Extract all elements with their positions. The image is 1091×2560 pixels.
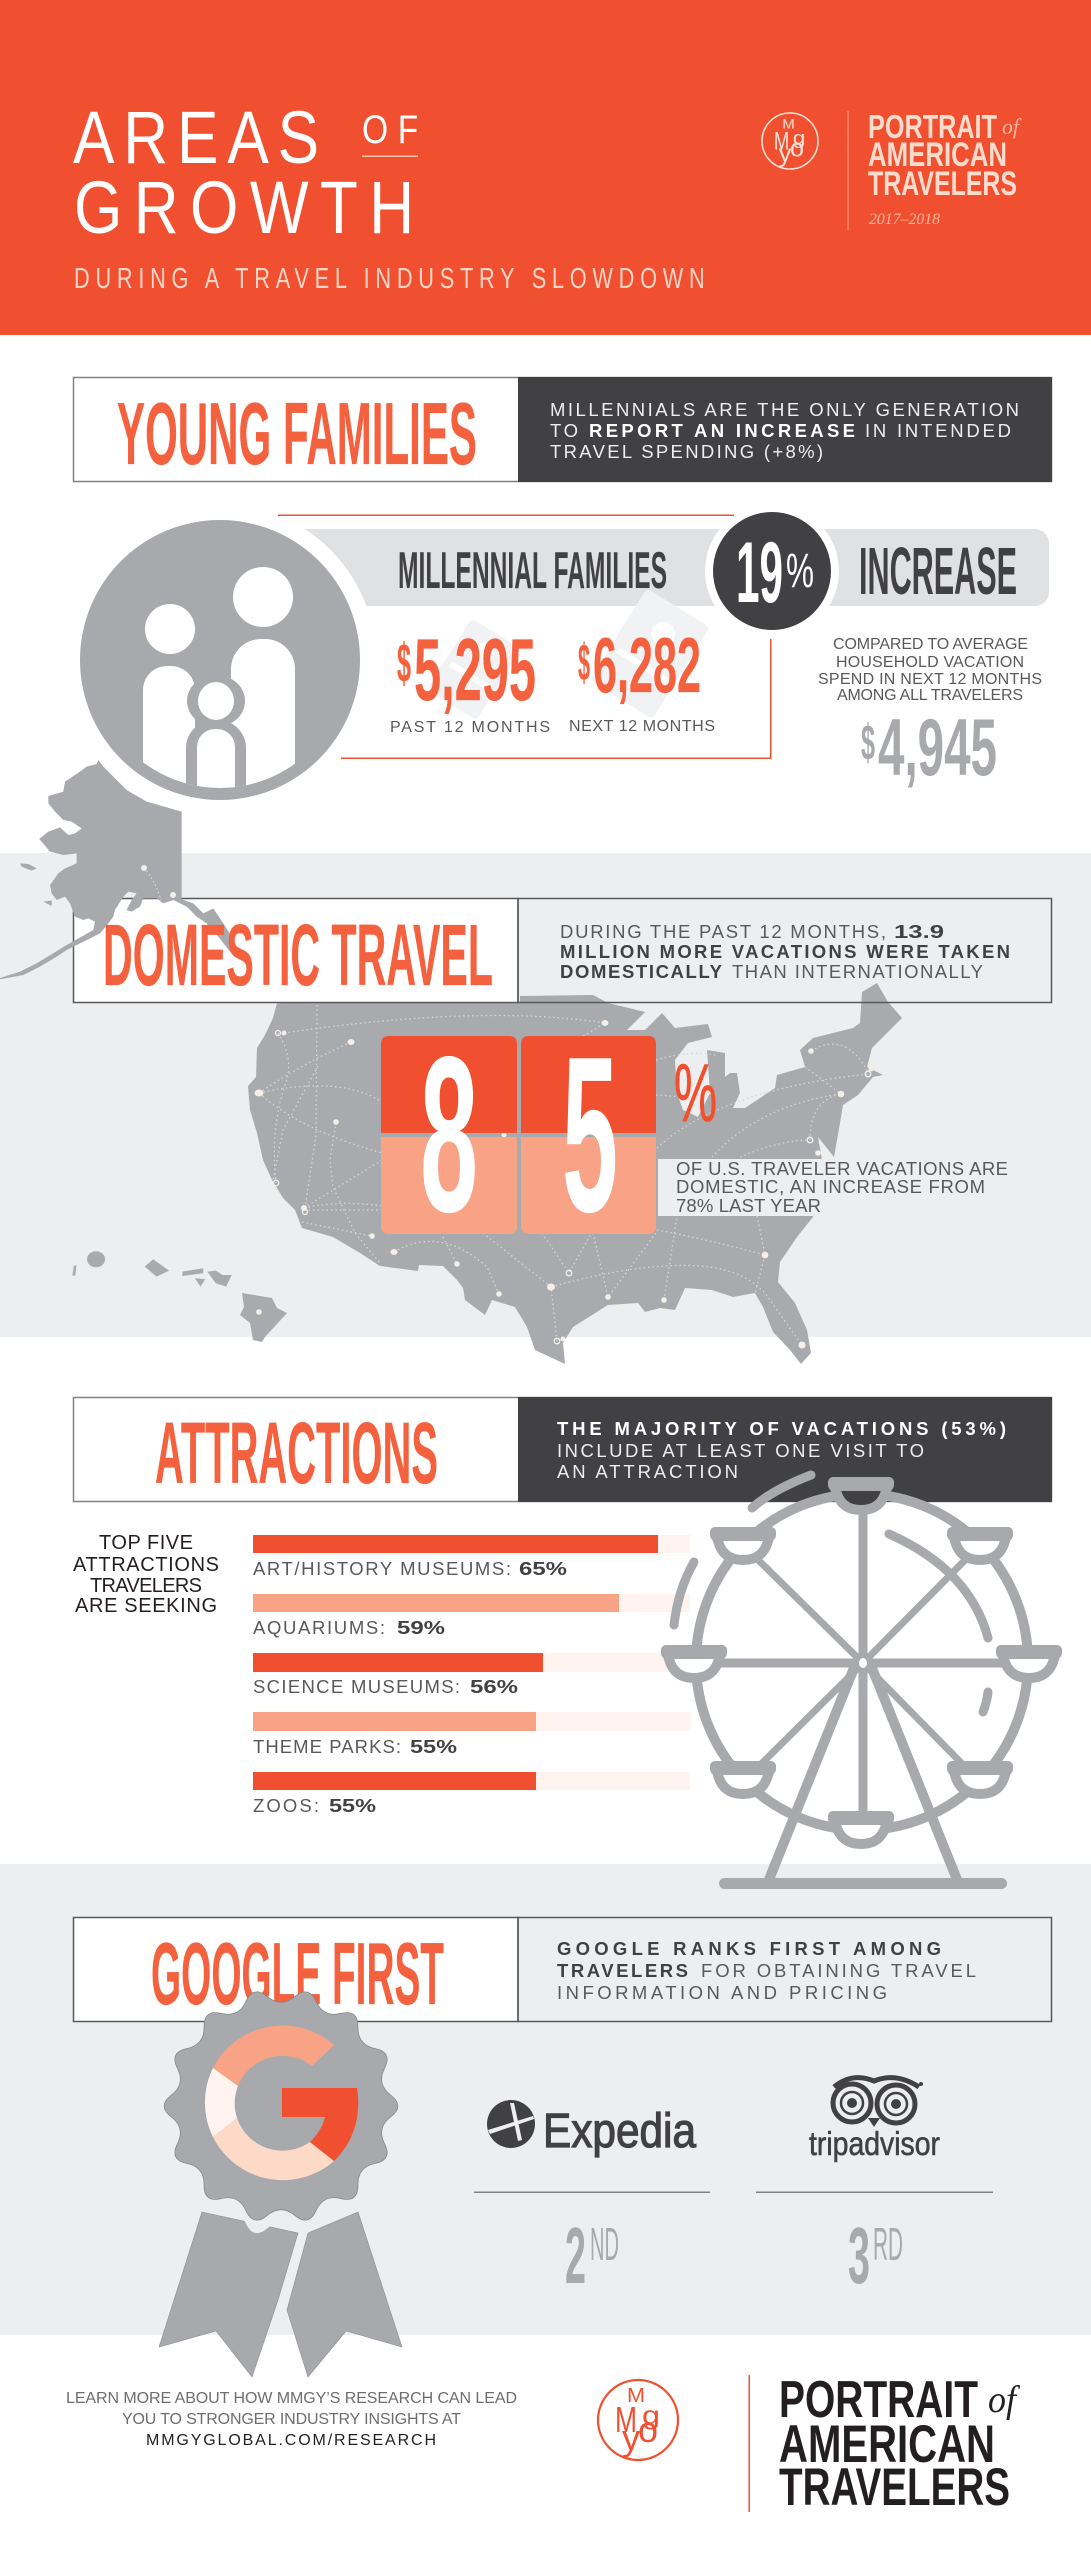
logo: tripadvisor [756,2078,993,2193]
footer text: learn more: MMGYGLOBAL.COM/RESEARCH [146,2432,436,2449]
title: Areas of Growth: AREAS [73,97,319,179]
title: Areas of Growth [73,97,418,249]
text: MILLENNIAL FAMILIES [398,542,667,600]
text: millennials intro: MILLENNIALS ARE THE ONLY GENERATION [550,399,1019,420]
header panel [0,0,1091,335]
text: vacation share: 78% LAST YEAR [676,1195,821,1216]
logo: expedia: Expedia [543,2105,696,2158]
text: average household comparison [818,636,1042,704]
logo text: Portrait of American Travelers footer: PORTRAIT [779,2371,978,2429]
bar: aquariums [253,1594,690,1638]
stat: past 12 months spend [390,620,550,736]
footer text: learn more [66,2390,517,2449]
decorative money note icons [427,588,710,720]
logo: MMGY header: g [793,128,805,148]
panel: young families heading box: YOUNG FAMILIES [117,384,477,483]
rank: 3rd: 3 [848,2211,870,2300]
logo: MMGY footer: M [627,2385,645,2407]
logo: MMGY header: y [779,140,792,168]
logo: MMGY footer: g [642,2400,660,2430]
bar: zoos: 55% [329,1795,376,1816]
bar chart: attractions [253,1535,690,1816]
logo: expedia [474,2100,710,2193]
text: google intro: TRAVELERS [557,1960,688,1981]
text: DOMESTIC TRAVEL [103,907,493,1004]
icon: google award rosette [159,1992,402,2377]
text: google intro: INFORMATION AND PRICING [557,1982,887,2003]
map: contiguous USA [248,983,902,1364]
panel: google first heading box: GOOGLE FIRST [151,1924,444,2023]
callout frame lines [278,514,772,759]
text: google intro: GOOGLE RANKS FIRST AMONG [557,1938,941,1959]
logo text: Portrait of American Travelers: of [1002,114,1022,139]
logo text: Portrait of American Travelers: PORTRAIT [868,108,997,145]
bar: science museums: SCIENCE MUSEUMS: [253,1676,460,1697]
text: domestic intro: MILLION MORE VACATIONS WERE TAKEN [560,941,1010,962]
logo: tripadvisor: tripadvisor [809,2125,940,2162]
text: average household comparison: COMPARED TO AVERAGE [833,636,1028,653]
panel: attractions heading box [74,1397,1052,1502]
logo text: Portrait of American Travelers: 2017–2018 [869,211,940,228]
flip tiles: 85 [381,1011,656,1259]
text: average household comparison: AMONG ALL TRAVELERS [837,687,1023,704]
logo text: Portrait of American Travelers footer: TRAVELERS [779,2458,1010,2517]
text: millennials intro: TO [550,420,578,441]
text: attractions intro [557,1418,1006,1482]
bar: art/history museums: ART/HISTORY MUSEUMS: [253,1558,511,1579]
logo text: Portrait of American Travelers: TRAVELERS [868,165,1017,203]
stat: past 12 months spend: 5,295 [414,620,536,719]
text: millennials intro: REPORT AN INCREASE [589,420,855,441]
stat: past 12 months spend: $ [397,632,411,694]
icon: family circle [80,520,366,800]
footer text: learn more: YOU TO STRONGER INDUSTRY INSIGHTS AT [122,2411,461,2428]
text: top five attractions: ARE SEEKING [75,1595,217,1617]
logo text: Portrait of American Travelers footer [779,2371,1020,2517]
logo: MMGY header [762,113,818,169]
bar: aquariums: 59% [397,1617,445,1638]
logo text: Portrait of American Travelers footer: AMERICAN [779,2415,995,2474]
bar: art/history museums: 65% [519,1558,567,1579]
text: vacation share: DOMESTIC, AN INCREASE FROM [676,1176,985,1197]
bar: theme parks: 55% [410,1736,457,1757]
text: top five attractions: ATTRACTIONS [73,1554,219,1576]
text: vacation share: OF U.S. TRAVELER VACATIONS ARE [676,1158,1008,1179]
title: Areas of Growth: OF [362,107,418,152]
badge: 19 percent [705,504,839,638]
logo: MMGY footer [598,2380,678,2460]
text: top five attractions: TOP FIVE [99,1532,193,1554]
panel: google grey band [0,1864,1091,2335]
stat: average spend [861,703,997,793]
text: google intro: FOR OBTAINING TRAVEL [701,1960,976,1981]
bar: aquariums: AQUARIUMS: [253,1617,385,1638]
logo: MMGY footer: M [615,2399,637,2440]
text: domestic intro [560,921,1010,982]
panel: attractions heading box: ATTRACTIONS [155,1405,438,1502]
logo: MMGY header: M [782,115,795,131]
logo: MMGY header: M [774,127,789,155]
text: domestic intro: THAN INTERNATIONALLY [732,961,983,982]
stat: next 12 months spend: 6,282 [593,621,701,709]
text: attractions intro: THE MAJORITY OF VACATIONS (53%) [557,1418,1006,1439]
map route lines [259,1005,868,1345]
map city dots [254,1020,874,1348]
bar: theme parks: THEME PARKS: [253,1736,401,1757]
google G mark [205,2026,358,2180]
icon: ferris wheel [661,1475,1062,1889]
text: millennials intro [550,399,1019,462]
stat: next 12 months spend: $ [578,634,590,692]
text: ND [590,2218,619,2270]
text: top five attractions [73,1532,219,1617]
rank: 2nd: 2 [565,2211,586,2300]
text: attractions intro: INCLUDE AT LEAST ONE VISIT TO [557,1440,924,1461]
bar: art/history museums [253,1535,690,1579]
flip tiles: 85: 5 [562,1011,618,1259]
bar: science museums: 56% [470,1676,518,1697]
stat: past 12 months spend: PAST 12 MONTHS [390,719,550,736]
badge: 19 percent: % [786,545,814,598]
bar: zoos: ZOOS: [253,1795,319,1816]
stat: next 12 months spend: NEXT 12 MONTHS [569,718,715,735]
logo text: Portrait of American Travelers [868,108,1022,228]
logo: MMGY footer: y [622,2417,640,2458]
logo text: Portrait of American Travelers footer: of [988,2379,1020,2421]
panel: domestic grey band [0,853,1091,1337]
map: Hawaii islands [72,1251,287,1342]
text: vacation share [658,1158,1008,1216]
title: Areas of Growth: GROWTH [74,167,414,249]
text: top five attractions: TRAVELERS [90,1575,202,1597]
bar: theme parks [253,1712,690,1757]
percent sign: % [674,1048,717,1139]
stat: average spend: $ [861,715,875,771]
logo: MMGY footer: o [638,2409,658,2450]
stat: next 12 months spend [569,621,715,735]
text: domestic intro: DOMESTICALLY [560,961,723,982]
map: Alaska [0,760,235,979]
text: average household comparison: SPEND IN NEXT 12 MONTHS [818,671,1042,688]
text: domestic intro: 13.9 [894,921,944,942]
text: average household comparison: HOUSEHOLD VACATION [836,654,1024,671]
stat: average spend: 4,945 [878,703,997,793]
text: attractions intro: AN ATTRACTION [557,1461,738,1482]
text: millennials intro: TRAVEL SPENDING (+8%) [550,441,823,462]
text: RD [873,2218,903,2270]
text: domestic intro: DURING THE PAST 12 MONTHS, [560,921,886,942]
flip tiles: 85: 8 [420,1011,478,1259]
bar: science museums [253,1653,690,1697]
logo: MMGY header: o [790,134,804,162]
panel: google first heading box [74,1918,1052,2023]
bar: zoos [253,1772,690,1816]
logo text: Portrait of American Travelers: AMERICAN [868,136,1007,174]
panel: domestic travel heading box [74,898,1052,1002]
subtitle: DURING A TRAVEL INDUSTRY SLOWDOWN [74,263,705,295]
banner: millennial families [290,529,1049,606]
text: millennials intro: IN INTENDED [865,420,1011,441]
text: google intro [557,1938,976,2003]
ribbon [159,2212,402,2377]
badge: 19 percent: 19 [736,525,783,621]
footer text: learn more: LEARN MORE ABOUT HOW MMGY’S RESEARCH CAN LEAD [66,2390,517,2407]
